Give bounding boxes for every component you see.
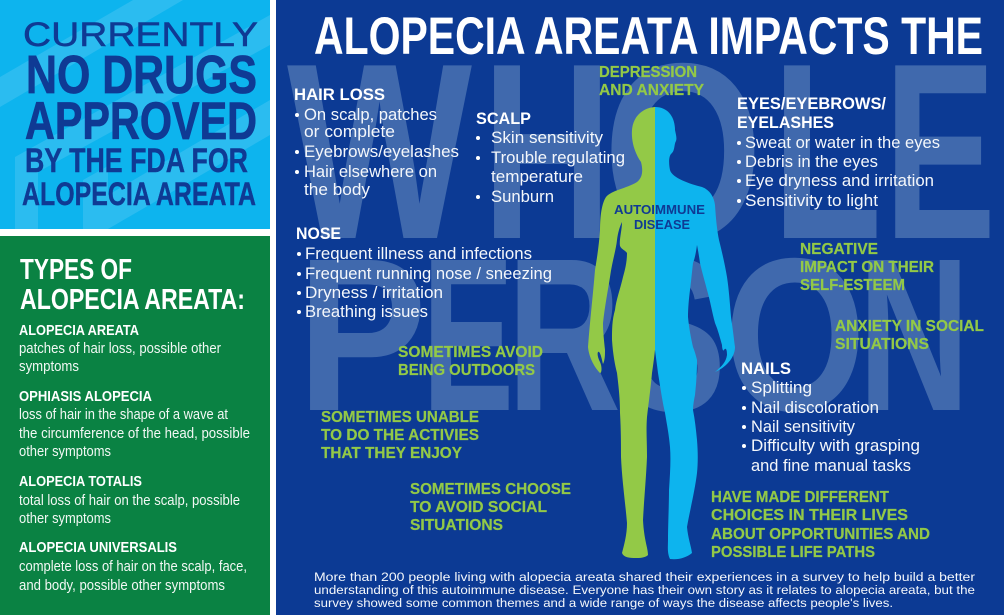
list: scalp <box>476 109 625 206</box>
callout: life choices: HAVE MADE DIFFERENT <box>711 489 890 506</box>
heading: currently: CURRENTLY <box>23 16 258 54</box>
callout: life choices: ABOUT OPPORTUNITIES AND <box>711 526 930 543</box>
footnote: More than 200 people living with alopecia areata shared their experiences in a survey to help build a better <box>314 570 975 584</box>
list: nose: Breathing issues <box>305 303 428 321</box>
type: alopecia universalis: and body, possible other symptoms <box>19 578 225 594</box>
heading: no drugs: NO DRUGS <box>26 45 257 105</box>
list: nails: Nail discoloration <box>751 399 879 417</box>
list: nose: NOSE <box>296 224 341 243</box>
body label: DISEASE <box>634 218 690 232</box>
type: ophiasis alopecia: the circumference of the head, possible <box>19 426 250 442</box>
callout: activities: SOMETIMES UNABLE <box>321 409 479 426</box>
callout: life choices: POSSIBLE LIFE PATHS <box>711 544 875 561</box>
type: ophiasis alopecia <box>19 389 250 460</box>
list: nose <box>296 224 552 321</box>
panel: FDA callout <box>0 0 270 229</box>
callout: self-esteem: NEGATIVE <box>800 241 878 258</box>
background word: person: S <box>620 214 726 457</box>
callout: self-esteem: IMPACT ON THEIR <box>800 259 934 276</box>
footnote <box>314 570 975 610</box>
callout: activities: THAT THEY ENJOY <box>321 445 463 462</box>
heading: types: TYPES OF <box>20 254 132 286</box>
background word: whole: W <box>287 12 472 292</box>
type: alopecia areata: symptoms <box>19 359 79 375</box>
list: nails: and fine manual tasks <box>751 457 911 475</box>
list: eyes: EYELASHES <box>737 113 834 132</box>
panel: main <box>276 0 1004 615</box>
callout: social situations <box>410 481 571 534</box>
body right half <box>655 107 735 559</box>
callout: social situations: SOMETIMES CHOOSE <box>410 481 571 498</box>
type: alopecia areata: ALOPECIA AREATA <box>19 323 139 339</box>
callout: life choices: CHOICES IN THEIR LIVES <box>711 507 908 524</box>
list: nails: Splitting <box>751 379 812 397</box>
list: eyes: Eye dryness and irritation <box>745 172 934 190</box>
background word: person: O <box>724 214 866 457</box>
body left half <box>588 107 656 558</box>
list: eyes: EYES/EYEBROWS/ <box>737 94 886 113</box>
background word: person: P <box>297 214 427 457</box>
type: alopecia universalis: complete loss of hair on the scalp, face, <box>19 559 247 575</box>
list: scalp: temperature <box>491 168 583 186</box>
type: ophiasis alopecia: loss of hair in the shape of a wave at <box>19 407 228 423</box>
callout: self-esteem <box>800 241 934 294</box>
callout: social anxiety <box>835 318 984 353</box>
list: scalp: Sunburn <box>491 188 554 206</box>
type: ophiasis alopecia: OPHIASIS ALOPECIA <box>19 389 152 405</box>
list: hair loss: On scalp, patches <box>304 106 437 124</box>
footnote: understanding of this autoimmune disease. Everyone has their own story as it relates to alopecia areata, but the <box>314 583 975 597</box>
list: hair loss: HAIR LOSS <box>294 85 385 104</box>
callout: outdoors: BEING OUTDOORS <box>398 362 535 379</box>
list: nails: NAILS <box>741 359 791 378</box>
callout: social situations: TO AVOID SOCIAL <box>410 499 547 516</box>
list: nails: Nail sensitivity <box>751 418 856 436</box>
list: nails <box>741 359 920 475</box>
background word: whole: L <box>772 12 882 292</box>
background word: whole: O <box>603 12 763 292</box>
type: alopecia universalis <box>19 540 247 594</box>
body label <box>614 203 705 232</box>
background word: whole <box>287 12 996 292</box>
callout: activities: TO DO THE ACTIVIES <box>321 427 479 444</box>
heading: alopecia areata: ALOPECIA AREATA <box>22 176 256 212</box>
callout: social situations: SITUATIONS <box>410 517 503 534</box>
type: alopecia totalis: other symptoms <box>19 511 111 527</box>
callout: social anxiety: SITUATIONS <box>835 336 929 353</box>
list: scalp: Trouble regulating <box>491 149 625 167</box>
list: nose: Dryness / irritation <box>305 284 443 302</box>
callout: depression: DEPRESSION <box>599 64 697 81</box>
callout: social anxiety: ANXIETY IN SOCIAL <box>835 318 984 335</box>
list: hair loss: Eyebrows/eyelashes <box>304 143 459 161</box>
type: alopecia areata <box>19 323 221 375</box>
background word: whole: H <box>482 12 612 292</box>
list: hair loss: Hair elsewhere on <box>304 163 437 181</box>
figure: split body <box>588 107 735 559</box>
type: alopecia totalis: total loss of hair on the scalp, possible <box>19 493 240 509</box>
heading: types: ALOPECIA AREATA: <box>20 284 245 316</box>
background word: person <box>297 214 970 457</box>
heading: types <box>20 254 245 316</box>
list: nose: Frequent illness and infections <box>305 245 532 263</box>
type: alopecia totalis: ALOPECIA TOTALIS <box>19 474 142 490</box>
footnote: survey showed some common themes and a wide range of ways the disease affects people's lives. <box>314 596 893 610</box>
callout: outdoors <box>398 344 543 379</box>
panel: types of alopecia areata <box>0 236 270 615</box>
callout: outdoors: SOMETIMES AVOID <box>398 344 543 361</box>
list: nails: Difficulty with grasping <box>751 437 920 455</box>
list: hair loss: or complete <box>304 123 395 141</box>
heading: by the FDA for: BY THE FDA FOR <box>25 142 248 180</box>
callout: depression <box>599 64 705 99</box>
list: scalp: Skin sensitivity <box>491 129 604 147</box>
background word: person: E <box>422 214 514 457</box>
body label: AUTOIMMUNE <box>614 203 705 217</box>
list: hair loss <box>294 85 459 199</box>
callout: depression: AND ANXIETY <box>599 82 705 99</box>
type: alopecia areata: patches of hair loss, possible other <box>19 341 221 357</box>
list: eyes: Debris in the eyes <box>745 153 878 171</box>
type: alopecia universalis: ALOPECIA UNIVERSALIS <box>19 540 177 556</box>
list: eyes: Sweat or water in the eyes <box>745 134 940 152</box>
background word: person: R <box>507 214 621 457</box>
list: scalp: SCALP <box>476 109 531 128</box>
type: ophiasis alopecia: other symptoms <box>19 444 111 460</box>
type: alopecia totalis <box>19 474 240 527</box>
callout: life choices <box>711 489 930 561</box>
list: eyes: Sensitivity to light <box>745 192 878 210</box>
list: hair loss: the body <box>304 181 371 199</box>
heading: approved: APPROVED <box>25 92 257 151</box>
list: eyes <box>737 94 940 210</box>
list: nose: Frequent running nose / sneezing <box>305 265 552 283</box>
callout: self-esteem: SELF-ESTEEM <box>800 277 905 294</box>
callout: activities <box>321 409 479 462</box>
